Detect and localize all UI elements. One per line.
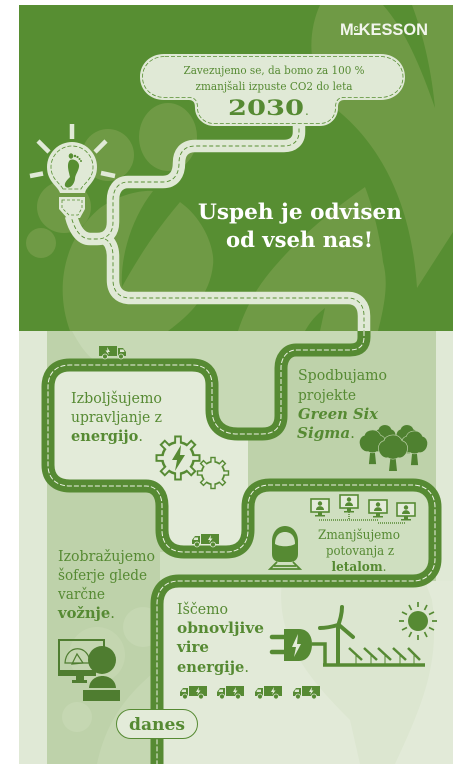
icon: train xyxy=(270,526,300,569)
text: green six sigma: Sigma. xyxy=(297,425,355,442)
text: green six sigma: Green Six xyxy=(298,406,378,423)
footprint xyxy=(65,153,82,188)
text: energy management: Izboljšujemo xyxy=(71,390,162,407)
text: reduce air travel: potovanja z xyxy=(326,544,394,559)
pledge speech bubble: zmanjšali izpuste CO2 do leta xyxy=(196,80,353,93)
icon: gears with lightning xyxy=(156,436,229,489)
road: top section from pledge bubble to bulb and down xyxy=(71,122,364,331)
truck on top of first loop xyxy=(99,346,126,359)
icon: driver with monitor xyxy=(58,640,120,701)
icon: sun xyxy=(399,602,437,640)
text: renewable energy: vire xyxy=(176,639,209,656)
McKesson logo: c xyxy=(354,23,359,33)
text: renewable energy: energije. xyxy=(177,659,249,676)
truck on second road xyxy=(192,534,219,547)
pledge speech bubble xyxy=(140,54,405,126)
text: renewable energy: obnovljive xyxy=(177,620,264,637)
text: green six sigma: projekte xyxy=(298,388,356,404)
pledge speech bubble: . xyxy=(305,104,309,118)
trucks row xyxy=(180,686,320,699)
icon: video conference monitors xyxy=(311,495,415,523)
McKesson logo: M xyxy=(340,21,354,39)
top leaves xyxy=(26,5,453,331)
text: reduce air travel: Zmanjšujemo xyxy=(318,528,400,543)
heading xyxy=(198,200,402,253)
text: energy management xyxy=(71,390,162,445)
pledge speech bubble: 2030 xyxy=(228,95,304,120)
road: lower section xyxy=(48,331,435,764)
McKesson logo: KESSON xyxy=(359,21,428,39)
heading: Uspeh je odvisen xyxy=(198,200,402,225)
text: energy management: upravljanje z xyxy=(71,410,162,426)
icon: trees xyxy=(359,425,428,471)
text: driver education: vožnje. xyxy=(57,605,115,622)
pledge text: Zavezujemo se, da bomo za 100 % xyxy=(184,64,364,77)
text: reduce air travel xyxy=(318,528,400,575)
text: driver education: varčne xyxy=(57,587,105,603)
text: renewable energy xyxy=(176,601,264,676)
text: driver education: šoferje glede xyxy=(58,567,147,584)
text: energy management: energijo. xyxy=(71,428,143,445)
today start label: danes xyxy=(129,715,185,734)
text: reduce air travel: letalom. xyxy=(332,560,386,575)
text: driver education xyxy=(57,549,155,622)
lower tinted regions xyxy=(72,331,370,434)
icon: light bulb with footprint xyxy=(30,124,115,218)
text: driver education: Izobražujemo xyxy=(58,549,155,565)
today start label xyxy=(116,710,198,738)
text: renewable energy: Iščemo xyxy=(177,601,228,618)
text: green six sigma: Spodbujamo xyxy=(298,368,387,384)
text: green six sigma xyxy=(297,368,387,442)
heading: od vseh nas! xyxy=(226,228,373,253)
icon: plug, wind turbine and solar panels xyxy=(272,607,425,665)
